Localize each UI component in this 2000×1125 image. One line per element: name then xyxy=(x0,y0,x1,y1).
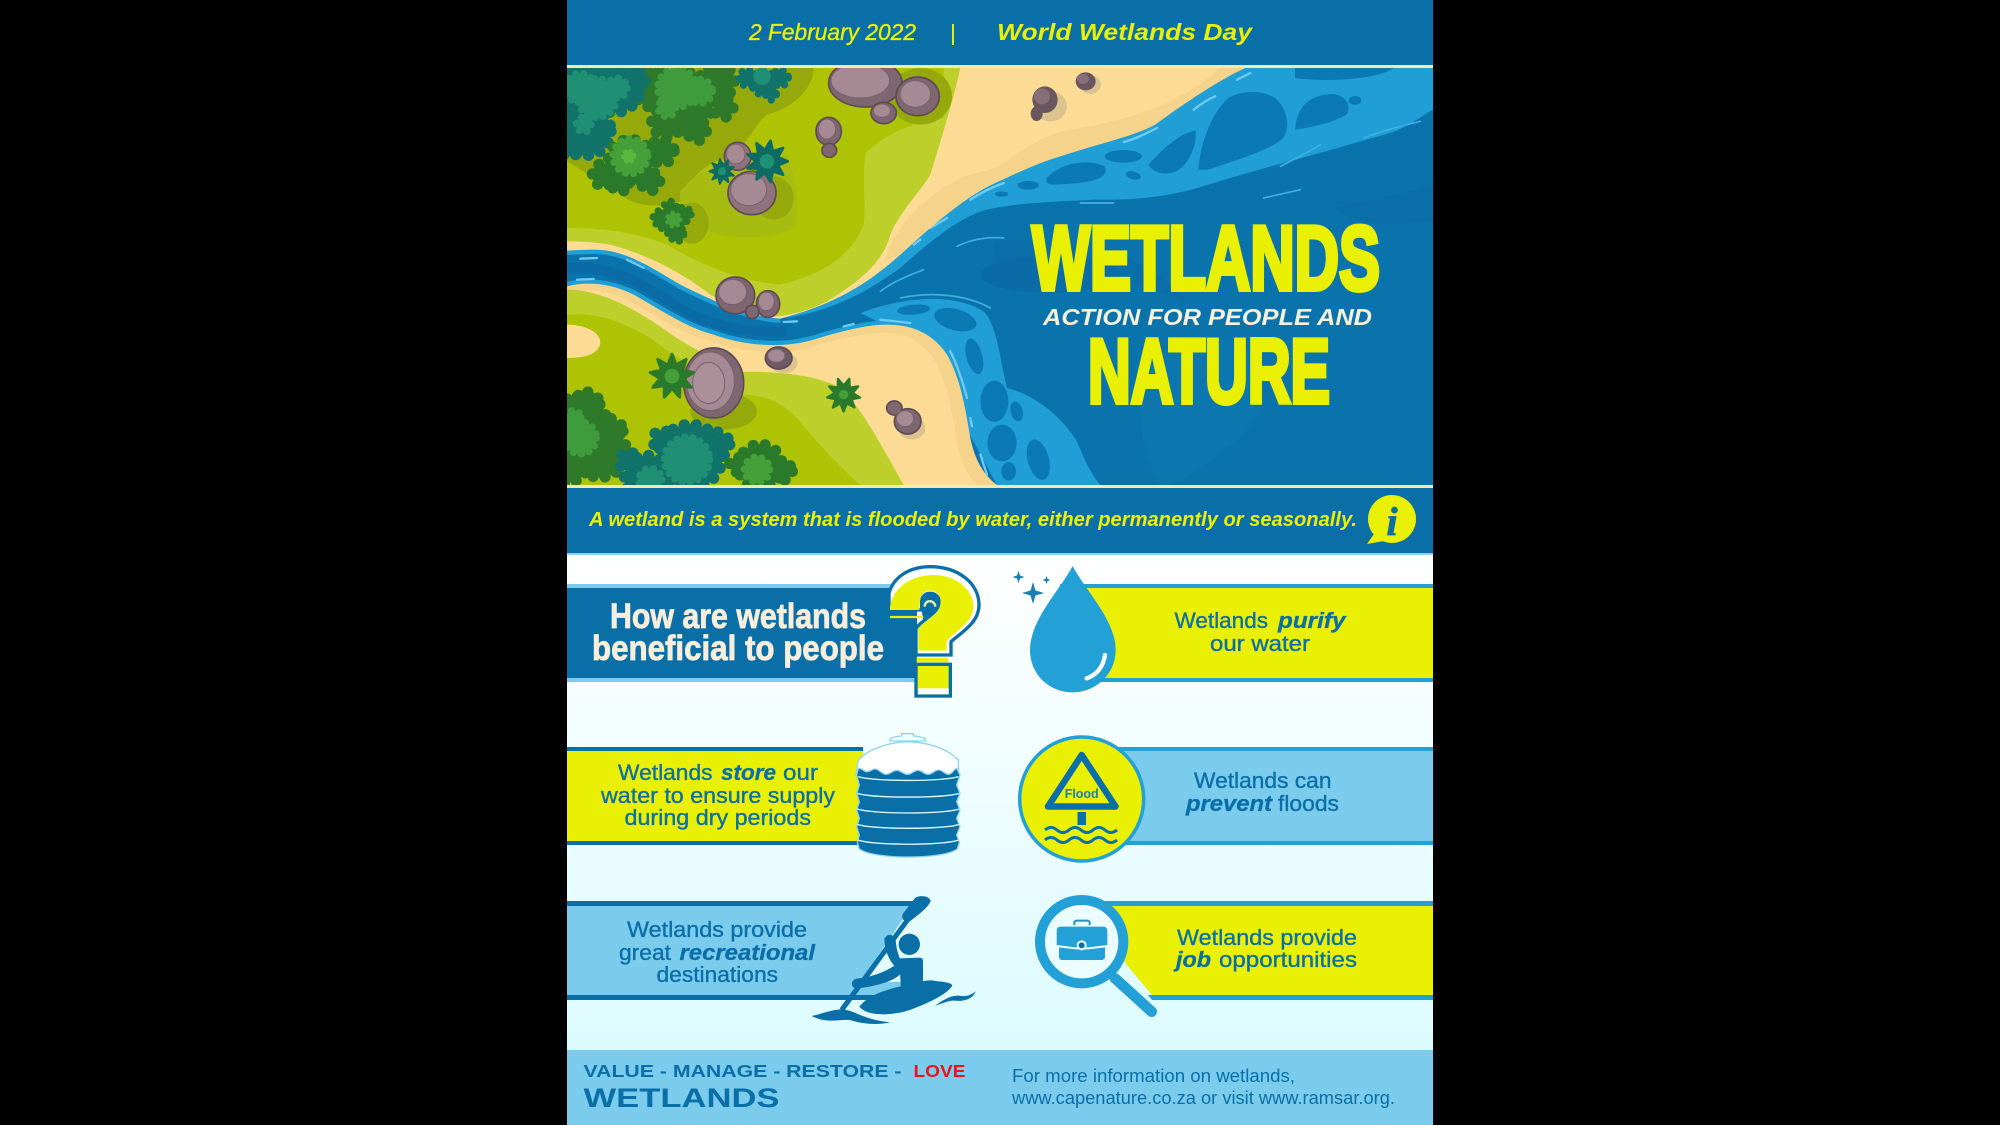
icon: flood warning sign: Flood xyxy=(1065,787,1099,801)
rock highlights lower xyxy=(686,349,914,427)
jobs text: job xyxy=(1173,947,1211,972)
bushes: lower xyxy=(643,347,863,414)
panel: footer xyxy=(567,1050,1433,1125)
flood text: floods xyxy=(1278,791,1339,816)
panel: question banner xyxy=(567,567,979,696)
icon: question mark xyxy=(889,567,979,696)
recreation text: Wetlands provide xyxy=(627,917,807,942)
hero title: WETLANDS: WETLANDS xyxy=(1032,208,1380,310)
definition text: A wetland is a system that is flooded by water, either permanently or seasonally. xyxy=(588,509,1357,531)
lower grass xyxy=(567,290,904,485)
panel: store benefit xyxy=(567,734,960,857)
hero subtitle: ACTION FOR PEOPLE AND xyxy=(1042,304,1372,330)
rock highlights xyxy=(719,63,1089,311)
panel: definition bar xyxy=(567,485,1433,555)
icon: magnifier with briefcase xyxy=(1040,900,1152,1012)
lower sand xyxy=(567,284,997,485)
store text: during dry periods xyxy=(624,805,811,830)
jobs text: Wetlands provide xyxy=(1177,925,1357,950)
trees: bottom xyxy=(567,386,798,485)
upper grass xyxy=(567,68,960,316)
purify text: our water xyxy=(1210,631,1310,656)
river edges and channel xyxy=(567,250,887,345)
purify text: Wetlands xyxy=(1174,608,1268,633)
icon: kayaker xyxy=(812,896,976,1024)
date: 2 February 2022 xyxy=(748,19,916,45)
panel: jobs benefit xyxy=(1040,900,1433,1012)
slogan: WETLANDS xyxy=(584,1083,780,1113)
upper sand xyxy=(567,68,1245,319)
icon: flood warning sign xyxy=(1020,737,1144,861)
recreation text: recreational xyxy=(680,940,816,965)
separator xyxy=(952,24,954,45)
rock shadows on sand xyxy=(770,75,1101,440)
icon: water tank xyxy=(856,734,960,857)
flood text: prevent xyxy=(1185,791,1274,816)
recreation text: destinations xyxy=(656,962,778,987)
banner heading xyxy=(592,597,884,668)
infographic poster xyxy=(567,0,1433,1125)
panel: recreation benefit xyxy=(567,896,976,1024)
trees: top left xyxy=(551,57,788,241)
icon: info bubble xyxy=(1367,495,1416,544)
flood text: Wetlands can xyxy=(1194,768,1332,793)
water highlights xyxy=(577,73,1250,475)
jobs text: opportunities xyxy=(1219,947,1357,972)
lower water holes xyxy=(897,303,1054,482)
store text xyxy=(600,760,835,830)
sand patch xyxy=(567,325,600,358)
hero title: NATURE: NATURE xyxy=(1088,322,1330,422)
panel: light benefits background xyxy=(567,555,1433,1050)
water swirls xyxy=(980,185,1433,485)
slogan: LOVE xyxy=(914,1061,966,1081)
upper shallow water band xyxy=(780,68,1433,319)
purify text xyxy=(1174,608,1347,656)
banner heading: How are wetlands xyxy=(610,597,866,636)
store text: store xyxy=(721,760,776,785)
panel: flood benefit xyxy=(1020,737,1433,861)
icon: info bubble: i xyxy=(1386,499,1398,544)
store text: our xyxy=(783,760,818,785)
upper water holes xyxy=(995,68,1394,197)
purify text: purify xyxy=(1277,608,1347,633)
panel: header band xyxy=(567,0,1433,68)
rocks: lower group xyxy=(684,347,921,434)
rocks: upper group xyxy=(716,59,1096,319)
icon: water drop xyxy=(1030,566,1116,692)
wet sand rim xyxy=(884,68,1245,261)
store text: water to ensure supply xyxy=(600,783,835,808)
slogan xyxy=(584,1061,966,1113)
bushes: upper xyxy=(707,141,788,187)
banner heading: beneficial to people xyxy=(592,629,884,668)
lower shallow water band xyxy=(860,299,1100,485)
recreation text: great xyxy=(619,940,671,965)
contact information xyxy=(1011,1066,1395,1108)
icon: sparkles xyxy=(1012,571,1050,604)
event name: World Wetlands Day xyxy=(997,19,1253,45)
contact information: www.capenature.co.za or visit www.ramsar.org. xyxy=(1011,1088,1395,1108)
recreation text xyxy=(619,917,816,987)
jobs text xyxy=(1173,925,1357,972)
panel: purify benefit xyxy=(1012,566,1433,692)
panel: hero illustration xyxy=(546,57,1433,501)
grass shadow under trees xyxy=(567,68,814,205)
contact information: For more information on wetlands, xyxy=(1012,1066,1295,1086)
store text: Wetlands xyxy=(618,760,712,785)
slogan: VALUE - MANAGE - RESTORE - xyxy=(584,1061,902,1081)
flood text xyxy=(1185,768,1339,816)
